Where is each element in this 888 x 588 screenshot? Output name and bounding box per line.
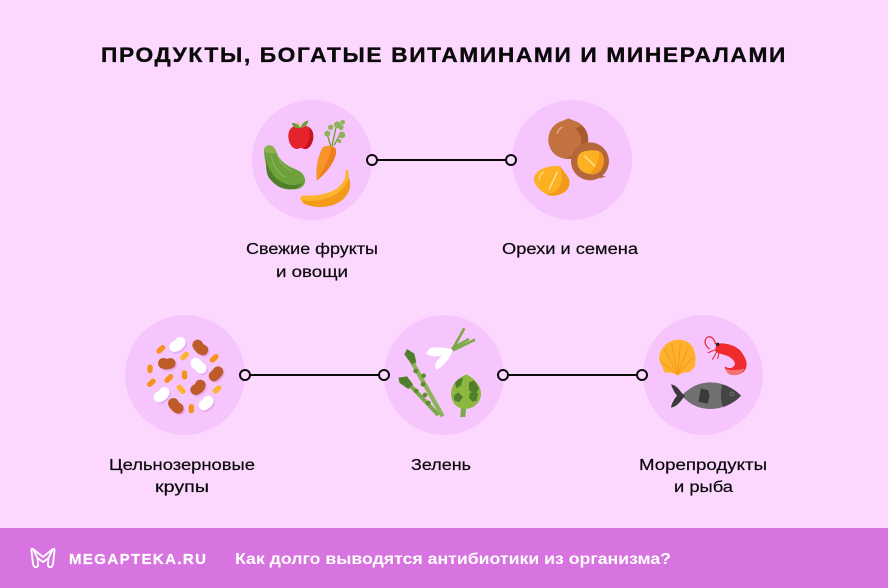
cracked nut (571, 142, 609, 180)
icon: nuts (534, 118, 609, 196)
footer link text: Как долго выводятся антибиотики из организма? (235, 551, 671, 568)
label: nuts and seeds: Орехи и семена (502, 241, 638, 258)
banana (300, 170, 350, 207)
shrimp (705, 337, 716, 349)
panel: whole grains (125, 315, 245, 435)
yellow grains (179, 354, 219, 391)
whole nut (548, 118, 588, 159)
brand name: MEGAPTEKA.RU (69, 551, 206, 568)
footer bar (0, 528, 888, 588)
fish tail (671, 384, 685, 408)
artichoke (460, 407, 466, 417)
connector: grains to greens (240, 370, 389, 380)
label: seafood and fish: и рыба (674, 479, 733, 496)
spring onions (452, 328, 475, 350)
beans brown (163, 345, 218, 408)
icon: fruits and vegetables (264, 119, 350, 207)
label: seafood and fish (639, 457, 767, 496)
icon: beans and grains (150, 342, 219, 411)
carrot (316, 146, 336, 181)
label: whole grains (109, 457, 255, 496)
label: fruits and vegetables (246, 241, 378, 281)
kernel (534, 166, 570, 196)
panel: nuts and seeds (512, 100, 632, 220)
title: ПРОДУКТЫ, БОГАТЫЕ ВИТАМИНАМИ И МИНЕРАЛАМИ (101, 44, 787, 67)
panel: fresh fruits and vegetables (252, 100, 372, 220)
bean shadows (160, 344, 219, 410)
label: seafood and fish: Морепродукты (639, 457, 767, 474)
label: fruits and vegetables: Свежие фрукты (246, 241, 378, 258)
panel: greens (384, 315, 504, 435)
panel: seafood and fish (643, 315, 763, 435)
label: whole grains: Цельнозерновые (109, 457, 255, 474)
carrot greens (327, 127, 341, 146)
scallop (659, 340, 696, 376)
fish body (682, 382, 741, 409)
label: greens: Зелень (411, 457, 471, 474)
icon: greens (398, 328, 481, 417)
orange grains (150, 348, 216, 411)
connector: greens to seafood (498, 370, 647, 380)
connector: fruits to nuts (367, 155, 516, 165)
beans white (159, 342, 208, 405)
icon: logo (31, 549, 55, 567)
icon: seafood (659, 337, 747, 409)
label: whole grains: крупы (155, 479, 209, 496)
fish fin (698, 388, 710, 404)
fish head (721, 384, 741, 407)
apple (288, 126, 313, 149)
label: fruits and vegetables: и овощи (276, 264, 348, 281)
asparagus (412, 362, 443, 416)
zucchini (264, 145, 305, 189)
